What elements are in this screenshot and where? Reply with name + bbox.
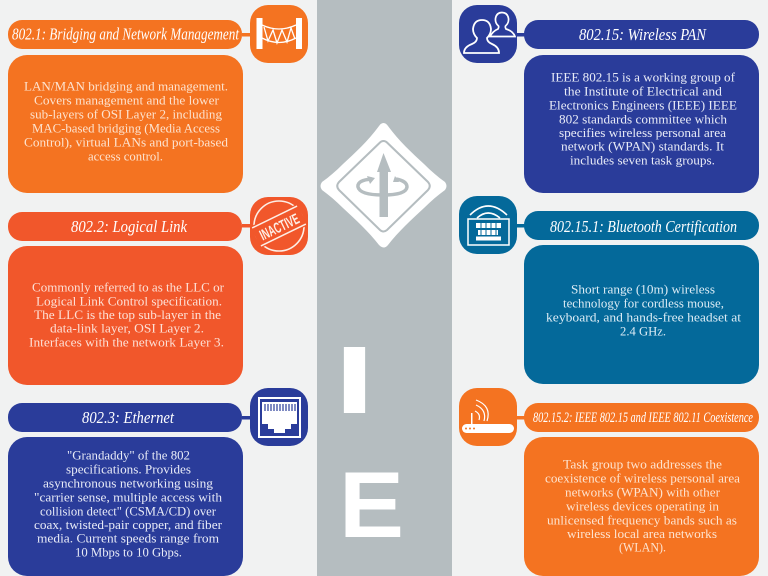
text block: keyboard, and hands-free headset at [546, 310, 741, 324]
icon: inactive stamp [250, 197, 308, 255]
icon: wireless keyboard [459, 196, 517, 254]
center band [317, 0, 452, 576]
text block: collision detect" (CSMA/CD) over [40, 504, 217, 518]
text block [29, 280, 225, 350]
heading: 802.15: Wireless PAN [579, 25, 707, 44]
text block: includes seven task groups. [570, 152, 715, 168]
text block: MAC-based bridging (Media Access [32, 120, 220, 136]
heading: 802.1: Bridging and Network Management [12, 24, 240, 44]
icon: IEEE diamond logo [320, 123, 446, 248]
big letter I: I [334, 327, 375, 434]
text block: 10 Mbps to 10 Gbps. [75, 544, 182, 560]
text block: unlicensed frequency bands such as [547, 512, 737, 528]
icon: inactive stamp: INACTIVE [257, 211, 302, 244]
text block: wireless local area networks [567, 526, 717, 541]
text block: wireless devices operating in [566, 498, 719, 514]
text block: specifications. Provides [66, 462, 191, 476]
text block: specifies wireless personal area [559, 125, 726, 140]
text block: coax, twisted-pair copper, and fiber [34, 517, 223, 532]
text block: coexistence of wireless personal area [545, 470, 740, 486]
text block: Electronics Engineers (IEEE) IEEE [549, 98, 737, 112]
text block: sub-layers of OSI Layer 2, including [30, 106, 222, 122]
text block [34, 448, 223, 560]
text block: asynchronous networking using [43, 476, 214, 490]
panel: 802.15.2 [459, 388, 759, 576]
text block: Control), virtual LANs and port-based [24, 134, 229, 150]
panel: 802.2 [8, 197, 308, 385]
panel: 802.15 [459, 5, 759, 193]
text block [24, 78, 229, 164]
big letter E: E [339, 452, 404, 557]
text block: Logical Link Control specification. [36, 294, 222, 308]
text block [546, 282, 741, 338]
text block: LAN/MAN bridging and management. [24, 78, 228, 94]
panel: 802.3 [8, 388, 308, 576]
icon: bridge [250, 5, 308, 63]
text block: Commonly referred to as the LLC or [32, 280, 225, 294]
heading: 802.3: Ethernet [82, 408, 175, 427]
text block: media. Current speeds range from [37, 530, 219, 546]
text block: "Grandaddy" of the 802 [67, 448, 190, 462]
panel: 802.1 [8, 5, 308, 193]
text block: 802 standards committee which [559, 112, 727, 126]
text block: data-link layer, OSI Layer 2. [50, 320, 204, 336]
text block: Covers management and the lower [34, 92, 220, 108]
text block [545, 456, 740, 554]
text block: access control. [88, 148, 163, 164]
icon: ethernet port [250, 388, 308, 446]
text block: technology for cordless mouse, [563, 296, 724, 310]
heading: 802.2: Logical Link [71, 217, 187, 236]
text block: the Institute of Electrical and [564, 84, 723, 98]
text block: networks (WPAN) with other [565, 484, 721, 500]
text block: "carrier sense, multiple access with [34, 490, 223, 504]
text block: Short range (10m) wireless [571, 282, 715, 296]
icon: people [459, 5, 517, 63]
text block: 2.4 GHz. [620, 324, 666, 338]
text block: (WLAN). [619, 540, 666, 554]
text block: network (WPAN) standards. It [561, 138, 724, 154]
text block: IEEE 802.15 is a working group of [551, 70, 736, 84]
text block: Task group two addresses the [563, 456, 722, 472]
panel: 802.15.1 [459, 196, 759, 384]
text block: Interfaces with the network Layer 3. [29, 334, 224, 350]
text block: The LLC is the top sub-layer in the [34, 307, 221, 322]
icon: wifi router [459, 388, 517, 446]
text block [549, 70, 737, 168]
